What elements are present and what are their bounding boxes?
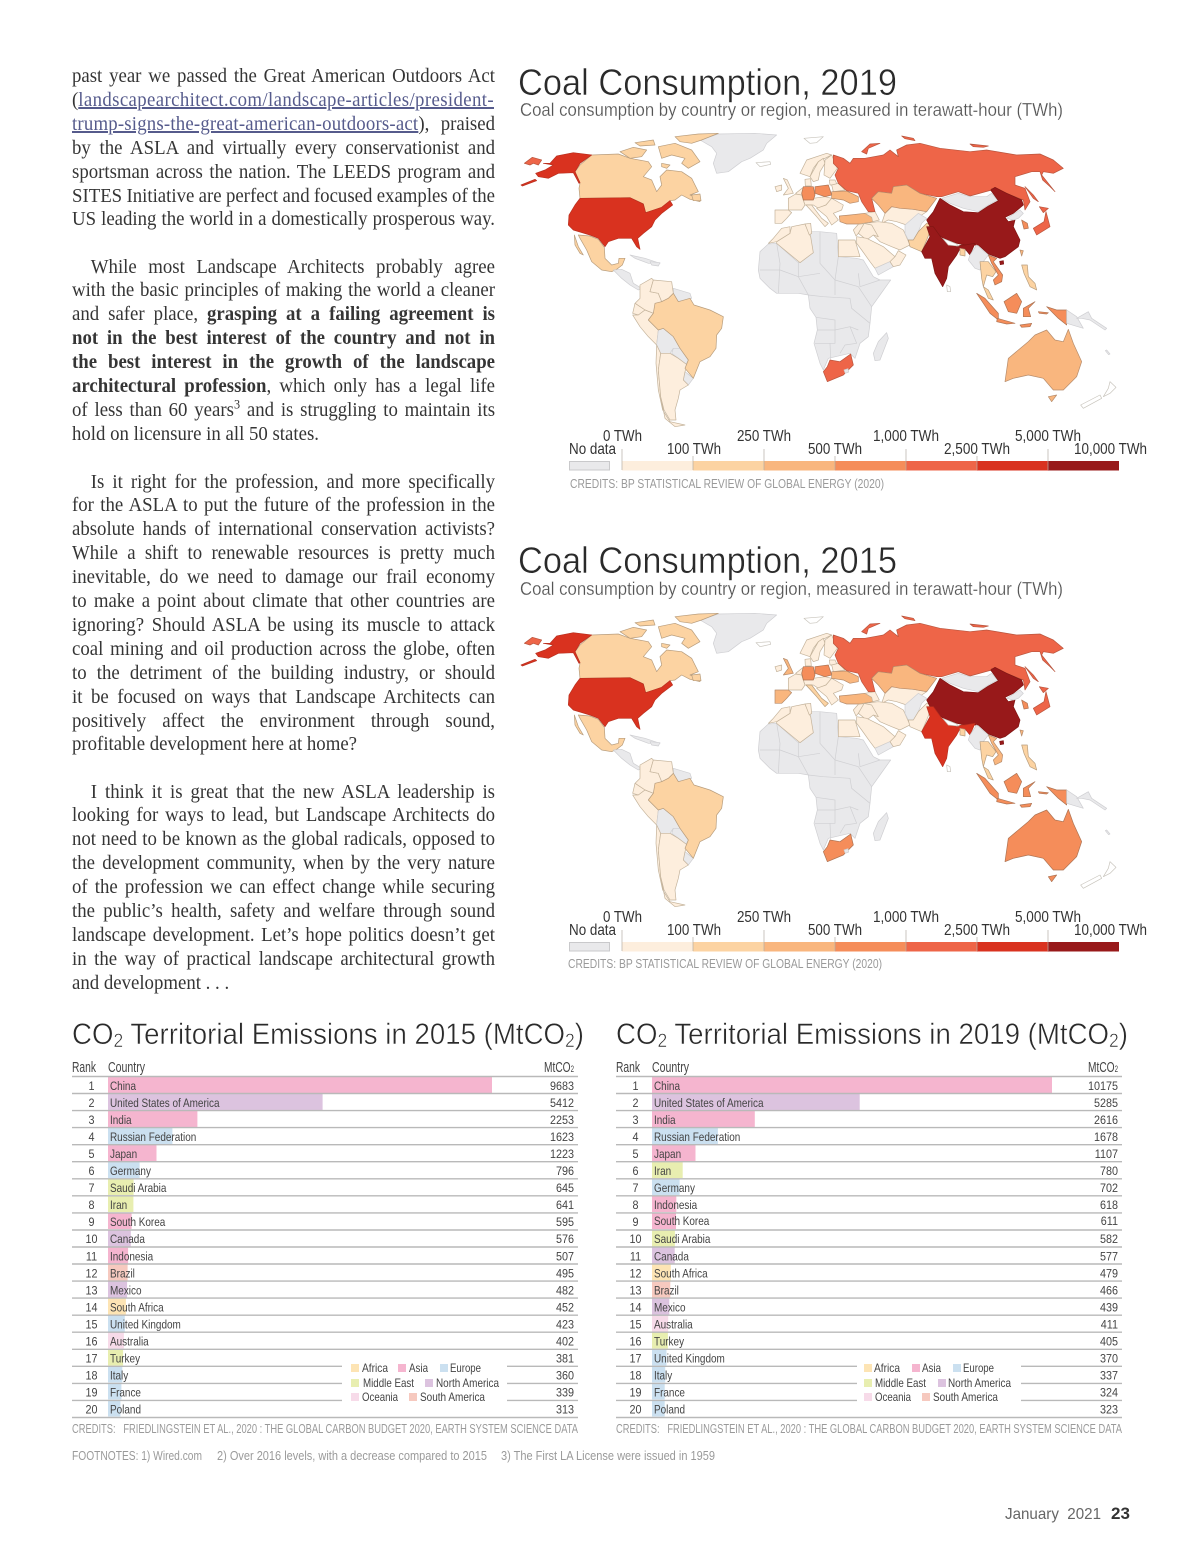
rank column 2019: 18 xyxy=(629,1370,642,1383)
value column 2019: 10175 xyxy=(1088,1081,1118,1093)
text block: paragraph 3: positively affect the environment through sound, xyxy=(72,710,495,732)
continent legend 2019: Asia xyxy=(922,1361,941,1375)
text block: paragraph 4: looking for ways to lead, but Landscape Architects do xyxy=(72,804,495,826)
rank column 2019: 3 xyxy=(632,1115,639,1127)
country column 2019: South Africa xyxy=(654,1268,708,1281)
value column 2015: 339 xyxy=(556,1387,574,1400)
rank column 2019: 20 xyxy=(629,1404,642,1417)
rank column 2015: 18 xyxy=(85,1370,98,1383)
bars 2015 xyxy=(108,1077,492,1416)
rank column 2019: 17 xyxy=(629,1353,642,1366)
value column 2015: 402 xyxy=(556,1336,574,1349)
table header 2015: Country xyxy=(108,1059,145,1076)
continent legend 2019: North America xyxy=(948,1376,1011,1390)
rank column 2015: 2 xyxy=(88,1098,95,1110)
country column 2015: India xyxy=(110,1114,132,1127)
value column 2019: 582 xyxy=(1100,1234,1118,1246)
rank column 2015: 16 xyxy=(85,1336,98,1349)
country column 2015: Russian Federation xyxy=(110,1131,196,1144)
text block: paragraph 2 xyxy=(72,256,495,445)
country column 2019: Saudi Arabia xyxy=(654,1233,711,1246)
country column 2015: China xyxy=(110,1080,137,1093)
continent legend 2015: South America xyxy=(420,1390,485,1404)
value column 2015: 360 xyxy=(556,1370,574,1383)
rank column 2015: 14 xyxy=(85,1302,98,1315)
continent legend 2015: Asia xyxy=(409,1361,428,1375)
rank column 2015: 20 xyxy=(85,1404,98,1417)
value column 2019: 324 xyxy=(1100,1387,1119,1400)
country column 2019: Italy xyxy=(654,1370,673,1383)
credits: 2015 table: CREDITS: FRIEDLINGSTEIN ET AL., 2020 : THE GLOBAL CARBON BUDGET 2020, EARTH SYSTEM SCIENCE DATA xyxy=(72,1422,578,1436)
south america, map 2019 xyxy=(633,278,723,427)
continent legend 2015 xyxy=(351,1361,499,1404)
country column 2019: Australia xyxy=(654,1319,693,1332)
rank column 2019: 6 xyxy=(632,1166,639,1178)
text block: paragraph 3: ignoring? Should ASLA be using its muscle to attack xyxy=(72,614,495,636)
text block: paragraph 4: landscape development. Let’s hope politics doesn’t get xyxy=(72,924,495,946)
country column 2015: Canada xyxy=(110,1233,146,1246)
rank column 2019: 13 xyxy=(629,1285,642,1298)
rank column 2019: 2 xyxy=(632,1098,639,1110)
continent legend 2019: South America xyxy=(933,1390,998,1404)
oceania, map 2019 xyxy=(977,293,1116,408)
text block: paragraph 2: and safer place, grasping at a failing agreement is xyxy=(72,303,495,325)
rank column 2019: 11 xyxy=(630,1251,641,1264)
country column 2015: Australia xyxy=(110,1336,149,1349)
south and east asia, map 2019 xyxy=(922,187,1050,300)
text block: paragraph 3: coal mining and oil production across the globe, often xyxy=(72,638,495,660)
value column 2019: 611 xyxy=(1101,1216,1118,1228)
rank column 2019: 15 xyxy=(629,1319,642,1332)
value column 2019: 323 xyxy=(1100,1404,1118,1417)
text block: paragraph 3: to make a point about climate that other countries are xyxy=(72,590,495,612)
map legend: 2019 scale: 1,000 TWh xyxy=(873,428,939,445)
rank column 2015: 13 xyxy=(85,1285,98,1298)
continent legend 2015: Europe xyxy=(450,1361,481,1375)
continent legend 2015: Oceania xyxy=(362,1390,398,1404)
rank column 2019: 12 xyxy=(629,1268,642,1281)
table: emissions 2015 xyxy=(72,1059,578,1418)
table header 2019 xyxy=(616,1059,1118,1076)
continent legend 2015: North America xyxy=(436,1376,499,1390)
value column 2015: 796 xyxy=(556,1166,574,1178)
map legend: 2015 scale: 5,000 TWh xyxy=(1015,909,1081,926)
rank column 2015: 12 xyxy=(85,1268,98,1281)
rank column 2015: 17 xyxy=(85,1353,98,1366)
value column 2015: 507 xyxy=(556,1251,574,1264)
text block: paragraph 2: not in the best interest of the country and not in xyxy=(72,327,495,349)
text block: paragraph 1: past year we passed the Great American Outdoors Act xyxy=(72,65,495,87)
footnotes: 2) Over 2016 levels, with a decrease compared to 2015 xyxy=(217,1449,487,1463)
subtitle: coal consumption 2019: Coal consumption by country or region, measured in terawatt-hour (TWh) xyxy=(520,100,1063,120)
credits: 2015 map: CREDITS: BP STATISTICAL REVIEW OF GLOBAL ENERGY (2020) xyxy=(568,957,882,971)
rank column 2015: 10 xyxy=(85,1234,98,1246)
europe and western asia, map 2019 xyxy=(756,136,1063,275)
table header 2019: MtCO2 xyxy=(1088,1059,1118,1076)
country column 2015: Iran xyxy=(110,1199,127,1212)
country column 2019: Poland xyxy=(654,1404,685,1417)
map legend: 2015 scale: 100 TWh xyxy=(667,922,721,939)
value column 2015: 495 xyxy=(556,1268,574,1281)
rank column 2019: 5 xyxy=(632,1149,639,1161)
title: coal consumption 2019: Coal Consumption, 2019 xyxy=(518,62,897,103)
map legend: 2015 scale: No data xyxy=(569,922,616,939)
value column 2019: 370 xyxy=(1100,1353,1118,1366)
bars 2019 xyxy=(652,1077,1052,1416)
rank column 2015: 11 xyxy=(86,1251,97,1264)
table header 2019: Country xyxy=(652,1059,689,1076)
continent legend 2019 xyxy=(864,1361,1011,1404)
footnotes xyxy=(72,1449,715,1463)
rank column 2015: 7 xyxy=(88,1183,95,1195)
heading: CO2 emissions 2019: 2 xyxy=(1109,1031,1119,1052)
value column 2019: 411 xyxy=(1101,1319,1118,1332)
country column 2015 xyxy=(110,1080,220,1417)
text block: paragraph 4 xyxy=(72,780,495,994)
subtitle: coal consumption 2015: Coal consumption by country or region, measured in terawatt-hour (TWh) xyxy=(520,579,1063,599)
title: coal consumption 2015: Coal Consumption, 2015 xyxy=(518,540,897,581)
folio: date and page number: January 2021 xyxy=(1005,1506,1101,1523)
rank column 2015: 19 xyxy=(85,1387,98,1400)
rank column 2015: 6 xyxy=(88,1166,95,1178)
text block: paragraph 4: the development community, when by the very nature xyxy=(72,852,495,874)
credits: 2019 map: CREDITS: BP STATISTICAL REVIEW OF GLOBAL ENERGY (2020) xyxy=(570,477,884,491)
heading: CO2 emissions 2015: 2 xyxy=(113,1031,123,1052)
country column 2015: Indonesia xyxy=(110,1251,154,1264)
country column 2015: Italy xyxy=(110,1370,129,1383)
table header 2015: MtCO2 xyxy=(544,1059,574,1076)
text block: paragraph 2: with the basic principles of making the world a cleaner xyxy=(72,279,495,301)
value column 2015: 313 xyxy=(556,1404,574,1417)
heading: CO2 emissions 2019: ) xyxy=(1119,1018,1128,1051)
text block: paragraph 3: to the detriment of the building industry, or should xyxy=(72,662,495,684)
rank column 2019: 7 xyxy=(632,1183,639,1195)
country column 2019: China xyxy=(654,1080,681,1093)
country column 2019: Germany xyxy=(654,1182,695,1195)
country column 2015: United States of America xyxy=(110,1097,220,1110)
text block: paragraph 3 xyxy=(72,470,496,755)
country column 2015: Mexico xyxy=(110,1285,142,1298)
text block: paragraph 1: SITES Initiative are perfect and focused examples of the xyxy=(72,185,495,207)
text block: paragraph 1: (landscapearchitect.com/landscape-articles/president- xyxy=(72,89,494,111)
map legend: 2015 scale: 250 TWh xyxy=(737,909,791,926)
text block: paragraph 3: While a shift to renewable resources is pretty much xyxy=(72,542,495,564)
table header 2019: Rank xyxy=(616,1059,640,1076)
country column 2019: India xyxy=(654,1114,676,1127)
value column 2015: 1223 xyxy=(550,1149,574,1161)
heading: CO2 emissions 2015: Territorial Emissions in 2015 (MtCO xyxy=(123,1018,565,1051)
text block: paragraph 4: not need to be known as the global radicals, opposed to xyxy=(72,828,495,850)
map legend: 2015 scale: 1,000 TWh xyxy=(873,909,939,926)
country column 2019: France xyxy=(654,1387,685,1400)
world map: coal consumption 2019 xyxy=(521,133,1116,427)
map legend: 2019 scale: 100 TWh xyxy=(667,441,721,458)
value column 2015: 381 xyxy=(556,1353,574,1366)
text block: paragraph 3: absolute hands of international conservation activists? xyxy=(72,518,495,540)
map legend: 2019 scale: 250 TWh xyxy=(737,428,791,445)
text block: paragraph 1: sportsman across the nation. The LEEDS program and xyxy=(72,161,495,183)
heading: CO2 emissions 2019: Territorial Emissions in 2019 (MtCO xyxy=(667,1018,1109,1051)
value column 2019: 702 xyxy=(1100,1183,1118,1195)
north america, map 2015 xyxy=(521,613,777,770)
continent legend 2019: Oceania xyxy=(875,1390,911,1404)
africa, map 2019 xyxy=(758,223,891,382)
rank column 2019: 1 xyxy=(632,1081,639,1093)
country column 2019: Canada xyxy=(654,1251,690,1264)
table header 2015: Rank xyxy=(72,1059,96,1076)
map legend: 2015 scale: 500 TWh xyxy=(808,922,862,939)
value column 2015: 9683 xyxy=(550,1081,574,1093)
value column 2015: 595 xyxy=(556,1217,574,1229)
rank column 2019: 9 xyxy=(632,1217,639,1229)
text block: paragraph 4: in the way of practical landscape architectural growth xyxy=(72,948,495,970)
rank column 2015: 1 xyxy=(88,1081,95,1093)
heading: CO2 emissions 2019: 2 xyxy=(657,1031,667,1052)
map legend: 2015 scale: 0 TWh xyxy=(603,909,642,926)
value column 2019: 466 xyxy=(1100,1285,1118,1298)
map legend: 2019 scale: 5,000 TWh xyxy=(1015,428,1081,445)
country column 2015: Japan xyxy=(110,1148,137,1161)
rank column 2015: 15 xyxy=(85,1319,98,1332)
map legend: 2019 scale: 10,000 TWh xyxy=(1074,441,1147,458)
text block: paragraph 1: trump-signs-the-great-american-outdoors-act), praised xyxy=(72,113,495,135)
table header 2015 xyxy=(72,1059,574,1076)
map legend: 2019 scale: 0 TWh xyxy=(603,428,642,445)
value column 2015: 641 xyxy=(556,1200,574,1212)
text block: paragraph 4: I think it is great that the new ASLA leadership is xyxy=(91,780,495,802)
country column 2019: United Kingdom xyxy=(654,1353,725,1366)
europe and western asia, map 2015 xyxy=(756,616,1063,755)
value column 2019: 5285 xyxy=(1094,1098,1118,1110)
text block: paragraph 1 xyxy=(72,65,495,230)
rank column 2015: 3 xyxy=(88,1115,95,1127)
row rules 2019 xyxy=(616,1076,1122,1418)
rank column 2019: 19 xyxy=(629,1387,642,1400)
heading: CO2 emissions 2019: CO xyxy=(616,1018,661,1051)
text block: paragraph 4: the public’s health, safety and welfare through sound xyxy=(72,900,495,922)
value column 2019: 1107 xyxy=(1095,1149,1118,1161)
rank column 2019 xyxy=(629,1081,642,1417)
map legend: 2015 scale: 10,000 TWh xyxy=(1074,922,1147,939)
map legend: 2015 scale: 2,500 TWh xyxy=(944,922,1010,939)
value column 2019: 577 xyxy=(1100,1251,1118,1264)
value column 2019 xyxy=(1088,1081,1119,1417)
country column 2015: Saudi Arabia xyxy=(110,1182,167,1195)
continent legend 2019: Middle East xyxy=(875,1376,927,1390)
text block: paragraph 1: by the ASLA and virtually every conservationist and xyxy=(72,137,495,159)
country column 2015: France xyxy=(110,1387,141,1400)
heading: CO2 emissions 2015: ) xyxy=(575,1018,584,1051)
africa, map 2015 xyxy=(758,703,891,862)
table: emissions 2019 xyxy=(616,1059,1122,1418)
text block: paragraph 2: architectural profession, which only has a legal life xyxy=(72,375,495,397)
country column 2015: Germany xyxy=(110,1165,151,1178)
value column 2015: 452 xyxy=(556,1302,574,1315)
country column 2019: Turkey xyxy=(654,1336,684,1349)
text block: paragraph 2: hold on licensure in all 50 states. xyxy=(72,423,319,445)
text block: paragraph 3: it be focused on ways that Landscape Architects can xyxy=(72,686,495,708)
footnotes: FOOTNOTES: 1) Wired.com xyxy=(72,1449,202,1463)
country column 2019: Indonesia xyxy=(654,1199,698,1212)
rank column 2015: 8 xyxy=(88,1200,95,1212)
value column 2019: 439 xyxy=(1100,1302,1118,1315)
map legend: 2019 scale: 2,500 TWh xyxy=(944,441,1010,458)
continent legend 2019: Europe xyxy=(963,1361,994,1375)
country column 2019: Japan xyxy=(654,1148,681,1161)
rank column 2019: 10 xyxy=(629,1234,642,1246)
text block: paragraph 3: inevitable, do we need to damage our frail economy xyxy=(72,566,495,588)
country column 2015: United Kingdom xyxy=(110,1319,181,1332)
country column 2015: South Korea xyxy=(110,1216,166,1229)
country column 2015: Brazil xyxy=(110,1268,135,1281)
continent legend 2015: Africa xyxy=(362,1361,388,1375)
oceania, map 2015 xyxy=(977,773,1116,888)
rank column 2015 xyxy=(85,1081,98,1417)
country column 2019: Mexico xyxy=(654,1302,686,1315)
rank column 2019: 16 xyxy=(629,1336,642,1349)
text block: paragraph 4: of the profession we can effect change while securing xyxy=(72,876,495,898)
rank column 2015: 9 xyxy=(88,1217,95,1229)
south america, map 2015 xyxy=(633,758,723,907)
map legend: 2019 scale: 500 TWh xyxy=(808,441,862,458)
text block: paragraph 4: and development . . . xyxy=(72,972,229,994)
continent legend 2015: Middle East xyxy=(363,1376,415,1390)
value column 2019: 618 xyxy=(1100,1200,1118,1212)
text block: paragraph 3: Is it right for the profession, and more specifically xyxy=(91,470,495,492)
country column 2019: Iran xyxy=(654,1165,671,1178)
text block: paragraph 2: of less than 60 years3 and is struggling to maintain its xyxy=(72,396,495,421)
rank column 2015: 4 xyxy=(88,1132,95,1144)
row rules 2015 xyxy=(72,1076,578,1418)
text block: paragraph 2: While most Landscape Architects probably agree xyxy=(91,256,495,278)
value column 2015 xyxy=(550,1081,574,1417)
rank column 2019: 14 xyxy=(629,1302,642,1315)
text block: paragraph 1: US leading the world in a domestically prosperous way. xyxy=(72,208,495,230)
text block: paragraph 3: for the ASLA to put the future of the profession in the xyxy=(72,494,495,516)
south and east asia, map 2015 xyxy=(922,667,1050,780)
world map: coal consumption 2015 xyxy=(521,613,1116,907)
text block: paragraph 2: the best interest in the growth of the landscape xyxy=(72,351,495,373)
value column 2019: 479 xyxy=(1100,1268,1118,1281)
rank column 2015: 5 xyxy=(88,1149,95,1161)
north america, map 2019 xyxy=(521,133,777,290)
value column 2019: 780 xyxy=(1100,1166,1118,1178)
country column 2019 xyxy=(654,1080,764,1417)
footnotes: 3) The First LA License were issued in 1959 xyxy=(501,1449,715,1463)
country column 2019: South Korea xyxy=(654,1215,710,1228)
value column 2015: 2253 xyxy=(550,1115,574,1127)
value column 2015: 5412 xyxy=(550,1098,574,1110)
heading: CO2 emissions 2015: 2 xyxy=(565,1031,575,1052)
country column 2015: Turkey xyxy=(110,1353,140,1366)
value column 2019: 405 xyxy=(1100,1336,1118,1349)
rank column 2019: 4 xyxy=(632,1132,639,1144)
value column 2015: 576 xyxy=(556,1234,574,1246)
value column 2019: 2616 xyxy=(1094,1115,1118,1127)
rank column 2019: 8 xyxy=(632,1200,639,1212)
map legend: 2019 scale: No data xyxy=(569,441,616,458)
continent legend 2019: Africa xyxy=(874,1361,900,1375)
text block: paragraph 3: profitable development here at home? xyxy=(72,733,357,755)
country column 2015: Poland xyxy=(110,1404,141,1417)
heading: CO2 emissions 2015: CO xyxy=(72,1018,117,1051)
value column 2019: 1678 xyxy=(1094,1132,1118,1144)
map legend: 2015 scale xyxy=(569,909,1147,952)
value column 2015: 423 xyxy=(556,1319,574,1332)
map legend: 2019 scale xyxy=(569,428,1147,470)
country column 2015: South Africa xyxy=(110,1302,164,1315)
country column 2019: United States of America xyxy=(654,1097,764,1110)
folio: date and page number: 23 xyxy=(1111,1504,1130,1523)
country column 2019: Brazil xyxy=(654,1285,679,1298)
value column 2015: 482 xyxy=(556,1285,574,1298)
country column 2019: Russian Federation xyxy=(654,1131,740,1144)
value column 2015: 645 xyxy=(556,1183,574,1195)
value column 2015: 1623 xyxy=(550,1132,574,1144)
value column 2019: 337 xyxy=(1100,1370,1118,1383)
